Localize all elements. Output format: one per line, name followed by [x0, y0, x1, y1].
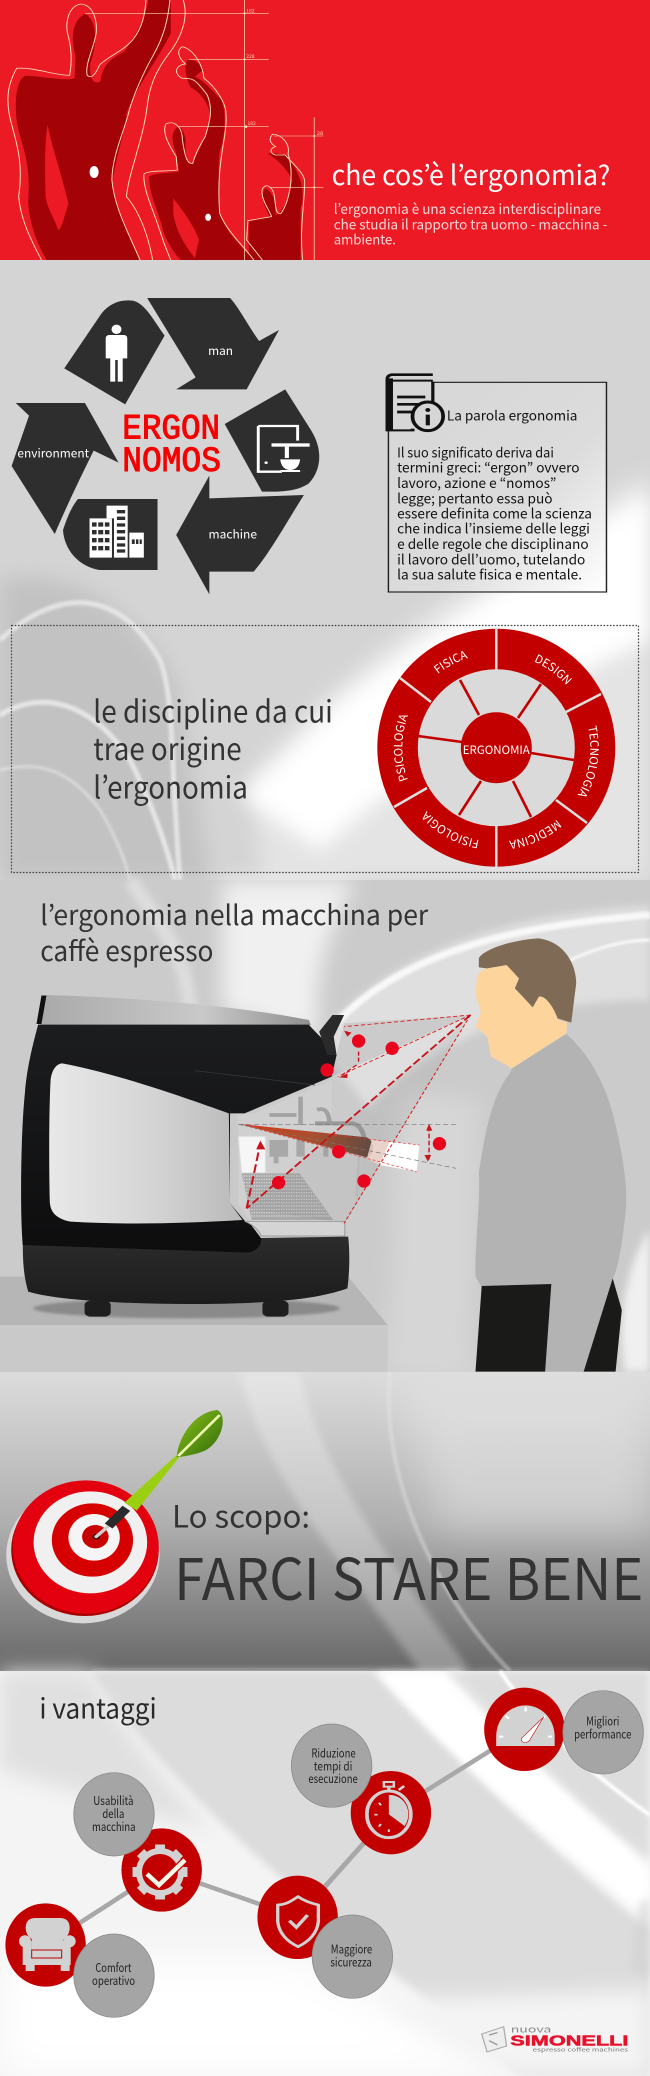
- human silhouettes with ergonomic measures: 28: [317, 130, 323, 137]
- item: usabilita della macchina: della: [102, 1804, 124, 1822]
- logo: nuova simonelli: espresso coffee machines: [533, 2045, 628, 2053]
- icon: gear with check: [133, 1844, 188, 1899]
- logo: nuova simonelli: [482, 2023, 628, 2053]
- panel: ergonomics in the espresso machine: [0, 893, 626, 1372]
- panel: disciplines: [10, 624, 640, 874]
- human silhouettes with ergonomic measures: 182: [247, 120, 256, 127]
- section background: goal band: [0, 1372, 650, 1671]
- cycle diagram: [12, 298, 319, 594]
- arrow: environment: environment: [17, 443, 89, 461]
- heading: La parola ergonomia: [447, 406, 577, 425]
- text block: definition of ergonomia: legge; pertanto essa può: [397, 488, 553, 508]
- wheel chart: disciplines: TECNOLOGIA: [578, 725, 599, 796]
- wheel chart: disciplines: [377, 628, 616, 867]
- heading: l’ergonomia nella macchina per: [40, 893, 429, 933]
- text block: definition of ergonomia: termini greci: “ergon” ovvero: [397, 458, 580, 477]
- human silhouettes with ergonomic measures: [8, 0, 323, 260]
- wheel chart: disciplines: ERGONOMIA: [463, 742, 530, 758]
- wheel chart: disciplines: FISICA: [434, 651, 468, 674]
- arrow: machine: machine: [209, 524, 257, 542]
- panel: intro hero: [0, 0, 650, 260]
- arrow: machine: [176, 476, 304, 594]
- human silhouettes with ergonomic measures: 228: [246, 53, 255, 60]
- text block: definition: ambiente.: [334, 228, 396, 249]
- human silhouettes with ergonomic measures: 182: [246, 7, 255, 14]
- arrow: man: man: [208, 341, 233, 359]
- section background: advantages band: [0, 1671, 650, 2076]
- logo: nuova simonelli: SIMONELLI: [510, 2032, 628, 2049]
- item: usabilita della macchina: [74, 1773, 202, 1912]
- item: usabilita della macchina: Usabilità: [93, 1791, 133, 1809]
- text block: definition of ergonomia: che indica l’insieme delle leggi: [397, 519, 590, 538]
- title: ERGON NOMOS: [122, 409, 221, 482]
- logo: nuova simonelli: nuova: [511, 2023, 551, 2036]
- wheel chart: disciplines: MEDICINA: [508, 820, 562, 849]
- panel: ergonomics cycle and definition: [12, 298, 606, 594]
- heading: caffè espresso: [40, 929, 213, 969]
- wheel chart: disciplines: PSICOLOGIA: [394, 716, 408, 782]
- item: riduzione tempi di esecuzione: Riduzione: [311, 1743, 356, 1761]
- wheel chart: disciplines: DESIGN: [534, 654, 572, 684]
- item: maggiore sicurezza: sicurezza: [330, 1952, 372, 1970]
- title: ERGON NOMOS: ERGON: [122, 409, 220, 449]
- text block: definition: [334, 198, 607, 249]
- text block: definition of ergonomia: Il suo significato deriva dai: [397, 443, 554, 462]
- icon: environment: [63, 499, 158, 570]
- text block: definition of ergonomia: essere definita come la scienza: [397, 504, 592, 523]
- item: usabilita della macchina: macchina: [92, 1817, 136, 1835]
- sight lines and reach arrows: [238, 1015, 471, 1223]
- item: maggiore sicurezza: [257, 1876, 393, 1998]
- item: migliori performance: Migliori: [586, 1711, 619, 1729]
- icon: machine: [225, 389, 319, 492]
- text block: definition of ergonomia: il lavoro dell’uomo, tutelando: [397, 549, 585, 569]
- icon: man: [64, 300, 165, 404]
- item: riduzione tempi di esecuzione: tempi di: [314, 1756, 352, 1774]
- icon: book with info: [387, 375, 443, 431]
- title: ERGON NOMOS: NOMOS: [122, 442, 221, 482]
- panel: advantages: [5, 1686, 643, 2053]
- item: comfort operativo: operativo: [92, 1971, 135, 1989]
- item: riduzione tempi di esecuzione: [291, 1724, 431, 1854]
- text block: definition of ergonomia: la sua salute fisica e mentale.: [397, 565, 582, 584]
- item: maggiore sicurezza: Maggiore: [331, 1939, 372, 1957]
- text block: definition of ergonomia: [397, 443, 592, 584]
- heading: le discipline da cui trae origine l'ergonomia: le discipline da cui: [93, 687, 333, 732]
- arrow: man: [147, 298, 279, 389]
- item: riduzione tempi di esecuzione: esecuzione: [308, 1769, 358, 1787]
- counter table: [0, 1277, 388, 1372]
- item: migliori performance: [484, 1688, 643, 1774]
- espresso machine: [21, 995, 365, 1317]
- heading: lo scopo: Lo scopo:: [172, 1492, 310, 1537]
- panel: la parola ergonomia: [387, 375, 606, 592]
- arrow: environment: [12, 403, 119, 534]
- operator figure: [475, 938, 626, 1372]
- background: grey swoosh texture: [0, 260, 650, 1372]
- item: comfort operativo: [5, 1903, 154, 2017]
- heading: le discipline da cui trae origine l'ergonomia: l’ergonomia: [93, 763, 248, 807]
- panel: the goal: [6, 1410, 643, 1623]
- heading: le discipline da cui trae origine l'ergonomia: [93, 687, 333, 807]
- brew group area: [230, 1080, 365, 1236]
- heading: [40, 893, 429, 969]
- icon: armchair: [19, 1918, 76, 1971]
- text block: definition of ergonomia: lavoro, azione e “nomos”: [397, 473, 556, 492]
- connector timeline: [46, 1729, 524, 1945]
- icon: target with dart: [6, 1410, 223, 1623]
- heading: i vantaggi: i vantaggi: [39, 1686, 157, 1727]
- wheel chart: disciplines: FISIOLOGIA: [422, 811, 478, 848]
- item: comfort operativo: Comfort: [95, 1958, 131, 1976]
- text block: definition of ergonomia: e delle regole che disciplinano: [397, 534, 589, 553]
- heading: le discipline da cui trae origine l'ergonomia: trae origine: [93, 725, 242, 769]
